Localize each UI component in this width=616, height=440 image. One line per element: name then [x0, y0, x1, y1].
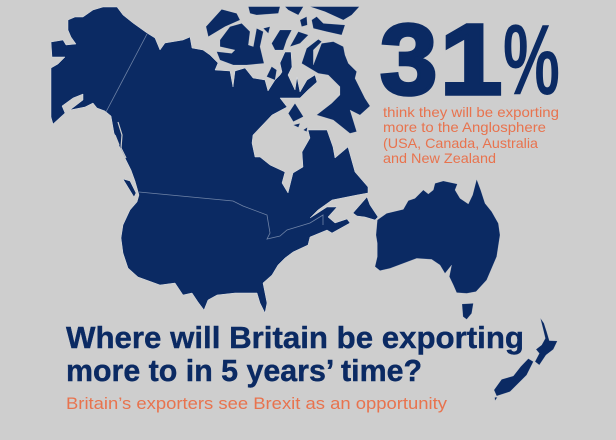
island: Vancouver Island	[123, 179, 136, 197]
borders: Alaska and US-Canada	[106, 34, 323, 239]
heading: more to in 5 years’ time?	[66, 353, 422, 388]
map: New Zealand	[494, 318, 557, 401]
stat: 31%	[380, 3, 560, 116]
stat description: (USA, Canada, Australia	[383, 135, 538, 151]
islands: Arctic Archipelago	[206, 7, 370, 133]
landmass: Australia	[375, 179, 500, 293]
stat description	[383, 104, 559, 166]
heading: Where will Britain be exporting	[66, 320, 524, 355]
landmass: Alaska, Canada and USA	[51, 7, 368, 313]
stat description: think they will be exporting	[383, 104, 559, 120]
subheading: Britain’s exporters see Brexit as an opportunity	[66, 394, 448, 413]
island: Newfoundland	[353, 197, 378, 220]
stat description: more to the Anglosphere	[383, 119, 546, 135]
stat description: and New Zealand	[383, 150, 496, 166]
island: Tasmania	[462, 303, 473, 319]
map: North America	[51, 7, 378, 313]
island: North Island	[535, 318, 557, 365]
digit 3: 3	[380, 3, 437, 116]
island: South Island	[494, 359, 533, 396]
digit 1: 1	[440, 5, 502, 116]
coastal inlets: British Columbia	[115, 122, 126, 158]
heading	[66, 320, 524, 388]
map: Australia	[375, 179, 500, 319]
island: Stewart Island	[495, 397, 497, 401]
percent sign: %	[503, 3, 560, 115]
